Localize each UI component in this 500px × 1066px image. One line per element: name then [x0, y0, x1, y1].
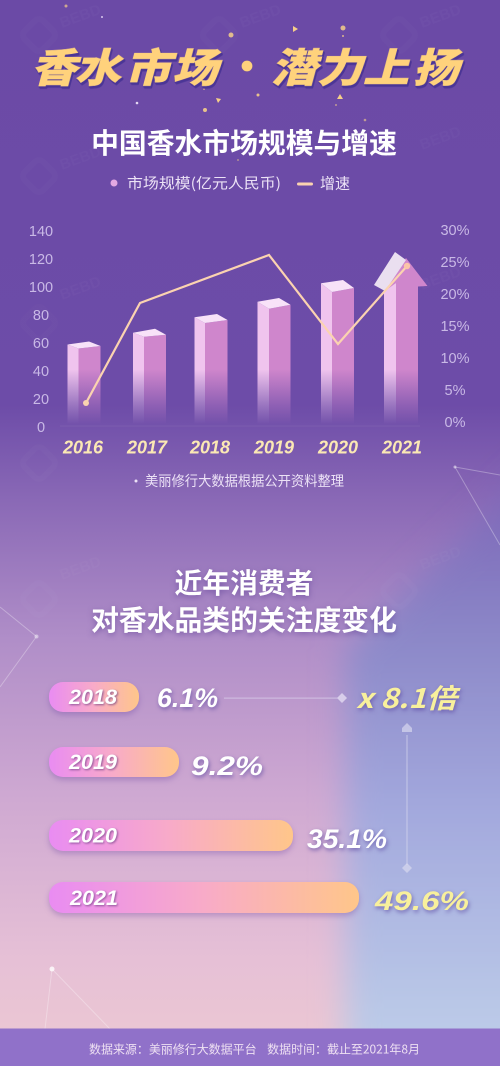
left axis labels: 20 — [33, 392, 49, 408]
row 2019 — [49, 747, 263, 781]
right axis labels — [440, 223, 470, 431]
arrow: vertical — [402, 723, 412, 873]
legend — [110, 172, 350, 194]
pill chart — [49, 682, 469, 916]
network lines decoration — [0, 466, 500, 1066]
left axis labels: 120 — [29, 252, 53, 268]
right axis labels: 20% — [440, 287, 470, 303]
row 2018: 2018 — [68, 686, 117, 709]
heading: market size and growth: 中国香水市场规模与增速 — [91, 122, 397, 162]
legend: growth — [297, 172, 350, 194]
left axis labels: 80 — [33, 308, 49, 324]
footer text: 数据来源：美丽修行大数据平台 数据时间：截止至2021年8月 — [89, 1040, 420, 1058]
left axis labels: 0 — [37, 420, 45, 436]
row 2019: 9.2% — [191, 751, 263, 781]
right axis labels: 25% — [440, 255, 470, 271]
row 2020: 35.1% — [307, 824, 387, 854]
title second part: 潜力上扬 — [268, 36, 471, 94]
arrow: horizontal — [224, 693, 347, 703]
legend: market size: 市场规模(亿元人民币) — [127, 172, 281, 194]
x axis years: 2019 — [253, 438, 294, 458]
footer band — [0, 1028, 500, 1066]
row 2021: 2021 — [69, 887, 118, 910]
heading: consumer attention: 近年消费者 — [174, 562, 314, 602]
right axis labels: 10% — [440, 351, 470, 367]
right axis labels: 15% — [440, 319, 470, 335]
sparkles — [64, 4, 366, 161]
row 2020: 2020 — [68, 824, 117, 848]
x axis years: 2017 — [126, 438, 168, 458]
title: 香水市场 — [28, 36, 230, 94]
legend: growth: 增速 — [320, 172, 350, 194]
row 2021 — [49, 882, 469, 916]
row 2019: 2019 — [68, 751, 117, 774]
x axis years: 2016 — [62, 438, 104, 458]
right axis labels: 0% — [445, 415, 466, 431]
x axis years: 2018 — [189, 438, 230, 458]
combo chart — [29, 223, 470, 458]
bar 2017 — [133, 329, 166, 424]
x axis years — [62, 438, 422, 458]
row 2021: 49.6% — [374, 886, 469, 916]
right axis labels: 5% — [445, 383, 466, 399]
left axis labels: 100 — [29, 280, 53, 296]
title separator dot — [242, 60, 252, 72]
row 2018 — [49, 682, 218, 713]
bar 2016 — [68, 342, 100, 424]
bar 2019 — [258, 298, 290, 424]
watermark pattern — [21, 1, 463, 617]
growth line — [83, 255, 410, 406]
bar 2018 — [194, 314, 228, 424]
right axis labels: 30% — [440, 223, 470, 239]
left axis labels: 60 — [33, 336, 49, 352]
bar 2021 arrow — [374, 252, 428, 424]
x axis years: 2021 — [381, 438, 422, 458]
left axis labels: 140 — [29, 224, 53, 240]
row 2020 — [49, 820, 387, 854]
heading: consumer attention: 对香水品类的关注度变化 — [91, 599, 397, 639]
left axis labels: 40 — [33, 364, 49, 380]
x axis years: 2020 — [317, 438, 358, 458]
left axis labels — [29, 224, 53, 436]
chart source note: 美丽修行大数据根据公开资料整理 — [145, 471, 344, 491]
heading: consumer attention — [91, 562, 397, 639]
row 2018: 6.1% — [157, 683, 218, 713]
multiplier callout: x 8.1倍 — [356, 677, 462, 716]
bar 2020 — [321, 280, 354, 424]
